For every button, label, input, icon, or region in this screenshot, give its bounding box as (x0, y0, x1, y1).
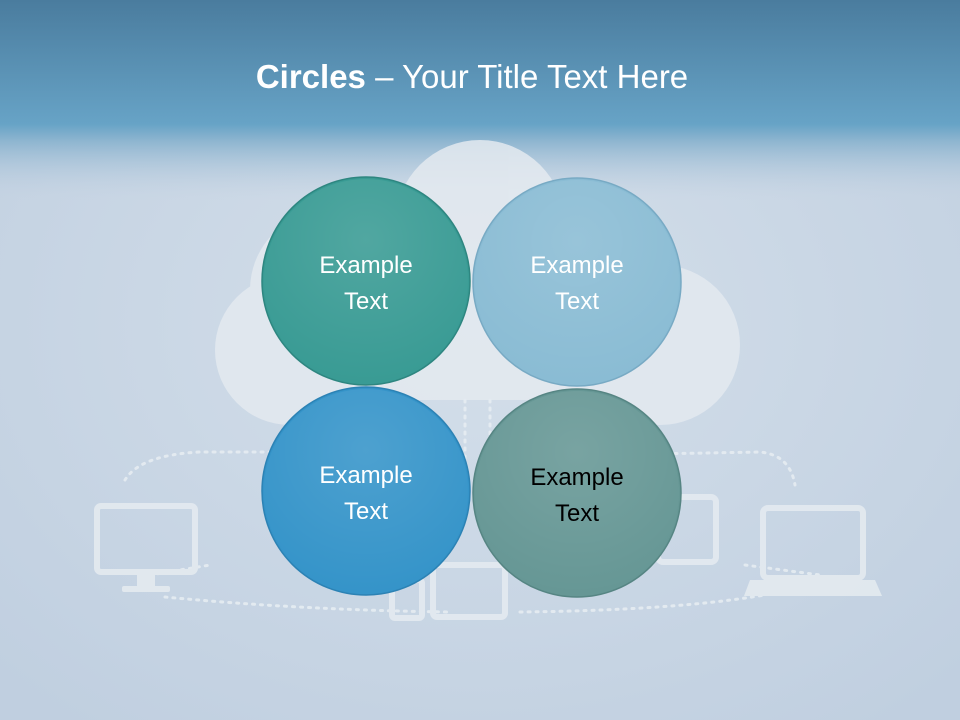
circle: bottom-right: Example (530, 464, 624, 491)
circle: bottom-right: Text (555, 500, 599, 527)
background illustration: cloud and devices (97, 140, 882, 618)
circle: top-right: Example (530, 252, 624, 279)
circle: bottom-left: Example (319, 462, 413, 489)
circle: top-left (262, 177, 470, 385)
circle: top-right (473, 178, 681, 386)
circle: bottom-left: Text (344, 498, 388, 525)
cloud (215, 140, 740, 425)
dotted network (125, 400, 820, 612)
circle: top-left: Text (344, 288, 388, 315)
circle: top-right: Text (555, 288, 599, 315)
header band (0, 0, 960, 200)
title: Circles – Your Title Text Here (256, 58, 688, 95)
circle: top-left: Example (319, 252, 413, 279)
circle: bottom-left (262, 387, 470, 595)
circle: bottom-right (473, 389, 681, 597)
devices (97, 497, 863, 618)
